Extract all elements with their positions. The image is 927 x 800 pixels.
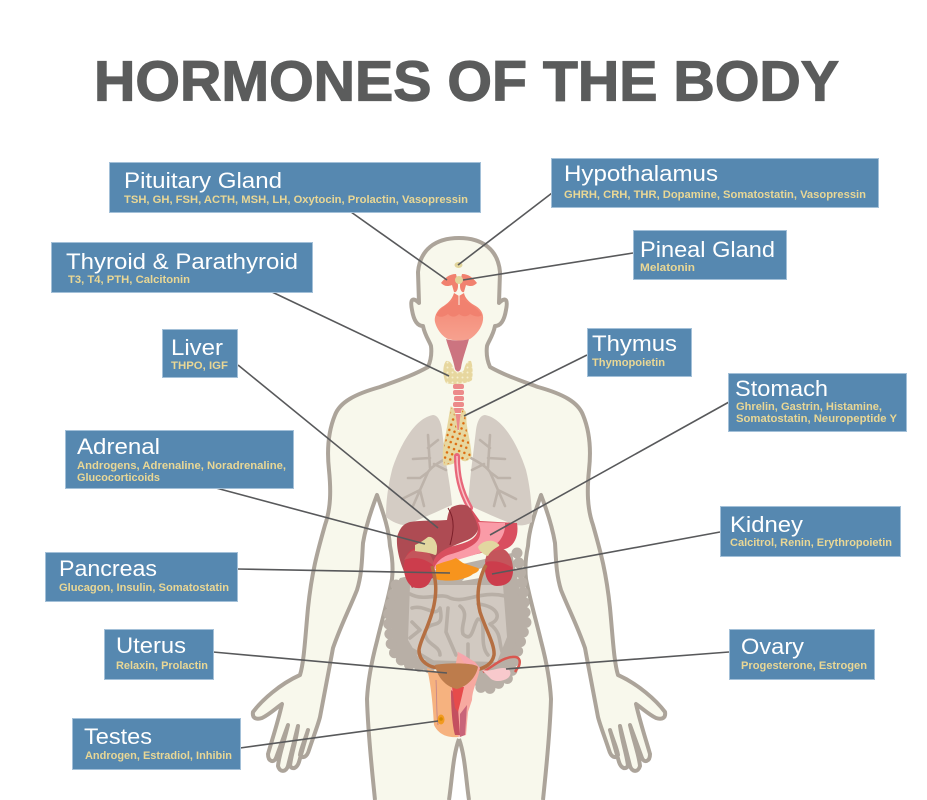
label: Pineal Gland: Pineal Gland xyxy=(640,237,775,262)
left kidney xyxy=(404,548,434,588)
label: Adrenal: Androgens, Adrenaline, Noradrenaline, xyxy=(77,460,286,472)
label: Thyroid and Parathyroid xyxy=(52,242,312,292)
label: Adrenal: Adrenal xyxy=(77,434,160,459)
label: Ovary xyxy=(730,630,874,680)
label: Ovary: Ovary xyxy=(741,634,804,659)
human body outline xyxy=(253,238,665,800)
label: Pituitary Gland: TSH, GH, FSH, ACTH, MSH, LH, Oxytocin, Prolactin, Vasopressin xyxy=(124,194,468,206)
label: Uterus: Relaxin, Prolactin xyxy=(116,660,208,672)
testis xyxy=(438,714,444,724)
right kidney xyxy=(485,548,513,586)
leader lines xyxy=(213,193,729,748)
title: HORMONES OF THE BODY xyxy=(94,50,839,114)
label: Thymus: Thymopoietin xyxy=(592,357,665,369)
intestines xyxy=(388,553,526,691)
label: Hypothalamus xyxy=(552,158,878,208)
pituitary gland xyxy=(441,274,477,292)
label: Pineal Gland xyxy=(634,230,786,280)
label: Adrenal: Glucocorticoids xyxy=(77,472,160,484)
hypothalamus xyxy=(454,262,462,268)
label: Stomach xyxy=(728,374,906,432)
label: Liver: THPO, IGF xyxy=(171,360,228,372)
esophagus xyxy=(457,456,470,508)
label: Thymus: Thymus xyxy=(592,331,677,356)
pineal gland xyxy=(455,276,463,284)
brain stem and larynx xyxy=(435,290,483,372)
label: Pancreas: Pancreas xyxy=(59,556,157,581)
label: Adrenal xyxy=(66,430,294,488)
label: Uterus xyxy=(104,630,214,680)
label: Stomach: Somatostatin, Neuropeptide Y xyxy=(736,413,898,425)
thyroid xyxy=(443,361,473,384)
label: Testes: Testes xyxy=(84,724,152,749)
label: Hypothalamus: Hypothalamus xyxy=(564,161,718,186)
label: Pineal Gland: Melatonin xyxy=(640,262,695,274)
lungs xyxy=(386,415,532,525)
right adrenal xyxy=(478,541,499,556)
reproductive tract xyxy=(427,652,480,737)
label: Pancreas: Glucagon, Insulin, Somatostatin xyxy=(59,582,229,594)
ovary and fallopian tube xyxy=(482,657,520,681)
ureters xyxy=(419,565,494,670)
label: Uterus: Uterus xyxy=(116,633,186,658)
label: Testes: Androgen, Estradiol, Inhibin xyxy=(85,750,232,762)
bladder xyxy=(435,663,478,689)
label: Stomach: Ghrelin, Gastrin, Histamine, xyxy=(736,401,882,413)
label: Ovary: Progesterone, Estrogen xyxy=(741,660,867,672)
label: Liver xyxy=(162,330,238,378)
pancreas xyxy=(436,558,482,581)
label: Thymus xyxy=(588,328,692,376)
left adrenal xyxy=(415,537,437,555)
label: Kidney: Kidney xyxy=(730,512,803,537)
label: Kidney xyxy=(720,506,900,556)
label: Hypothalamus: GHRH, CRH, THR, Dopamine, Somatostatin, Vasopressin xyxy=(564,189,866,201)
liver crease xyxy=(448,508,453,545)
label: Stomach: Stomach xyxy=(735,376,828,401)
label: Pituitary Gland: Pituitary Gland xyxy=(124,168,282,193)
label: Pancreas xyxy=(46,552,238,602)
label: Thyroid and Parathyroid: T3, T4, PTH, Calcitonin xyxy=(68,274,190,286)
thymus xyxy=(443,407,471,465)
trachea xyxy=(453,384,464,430)
label: Testes xyxy=(72,718,240,770)
label: Pituitary Gland xyxy=(110,162,480,212)
label: Kidney: Calcitrol, Renin, Erythropoietin xyxy=(730,537,892,549)
label: Thyroid and Parathyroid: Thyroid & Parathyroid xyxy=(66,249,298,274)
stomach xyxy=(433,507,518,570)
liver xyxy=(397,505,479,588)
label: Liver: Liver xyxy=(171,335,223,360)
